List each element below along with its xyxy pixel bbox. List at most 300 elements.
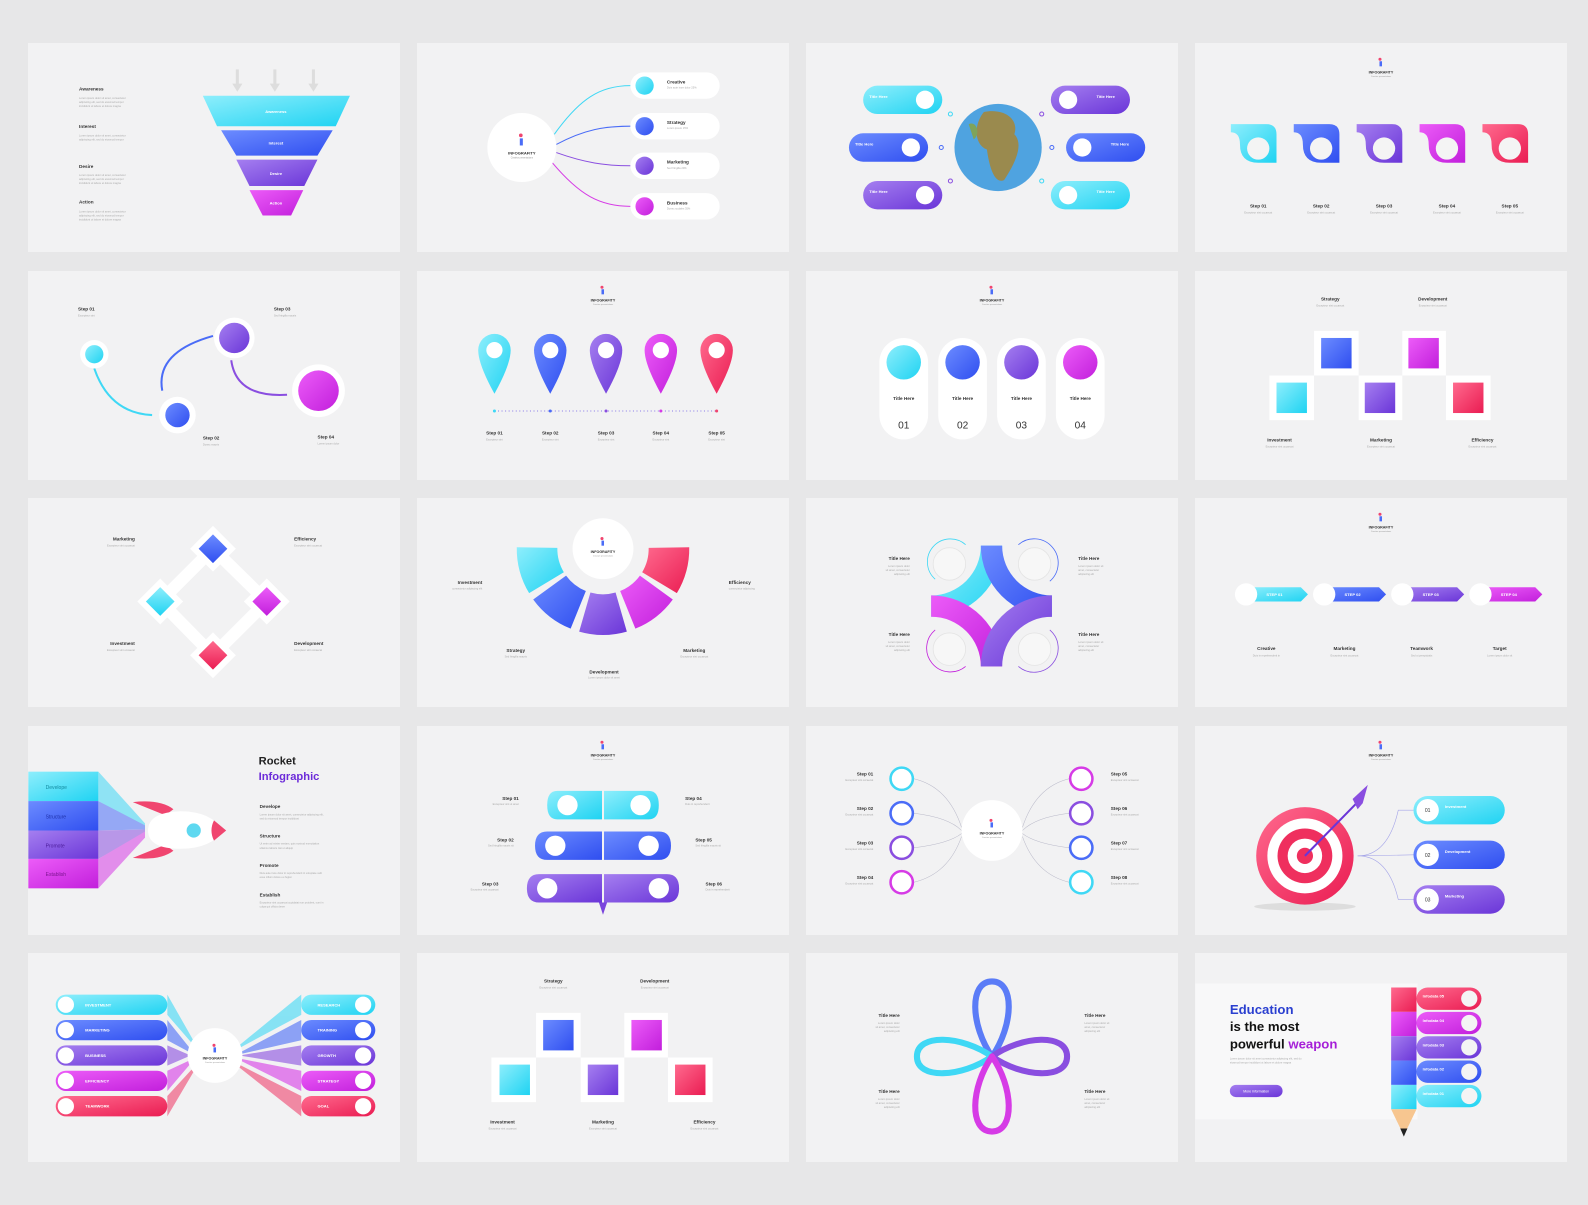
pencil: Infodata 02 xyxy=(1423,1067,1445,1072)
step labels xyxy=(486,430,725,441)
text blocks: sit amet, consectetur xyxy=(886,644,910,648)
arrows: funnel input xyxy=(232,69,318,92)
step labels xyxy=(1244,203,1524,214)
text blocks: amet, consectetur xyxy=(1084,1101,1105,1105)
pills: Business xyxy=(667,200,688,205)
button xyxy=(1230,1085,1283,1097)
right bars: STRATEGY xyxy=(317,1078,340,1083)
labels: Lorem ipsum dolor sit xyxy=(1487,653,1513,657)
labels: Excepteur sint occaecat xyxy=(1331,653,1359,657)
center logo circle: Creative presentations xyxy=(593,554,613,557)
labels: Excepteur sint occaecat xyxy=(845,812,874,816)
panel: hub slide xyxy=(806,726,1178,934)
funnel text blocks: adipiscing elit, sed do eiusmod tempor xyxy=(79,177,124,181)
left bars: TEAMWORK xyxy=(85,1104,110,1109)
capsules: 03 xyxy=(1016,420,1027,431)
pills: Development xyxy=(1445,848,1471,853)
funnel text blocks: Desire xyxy=(79,164,94,169)
text blocks: culpa qui officia deser xyxy=(260,904,285,908)
panel: squares slide 2 xyxy=(417,953,789,1162)
center logo circle xyxy=(487,113,556,182)
labels: Excepteur sint occaecat xyxy=(845,846,874,850)
labels: Excepteur sint occaecat xyxy=(1469,444,1497,448)
labels: Efficiency xyxy=(729,580,751,585)
labels: Lorem ipsum dolor sit amet xyxy=(588,676,620,680)
panel: capsule slide xyxy=(806,270,1178,480)
labels: Duis in reprehenderit in xyxy=(1253,653,1280,657)
labels: Marketing xyxy=(592,1119,614,1124)
labels: Marketing xyxy=(683,648,705,653)
funnel chart: Awareness xyxy=(265,109,287,114)
step texts: Donec mauris xyxy=(203,442,220,446)
labels: Creative xyxy=(1257,646,1276,651)
arrow steps: STEP 02 xyxy=(1344,592,1361,597)
capsules: Title Here xyxy=(1011,395,1032,400)
logo: Creative presentations xyxy=(1371,530,1391,533)
panel: bow-tie slide xyxy=(28,953,400,1162)
center logo circle: INFOGRAFITY xyxy=(591,550,616,554)
right pills xyxy=(1040,86,1145,209)
capsules: Title Here xyxy=(1070,395,1091,400)
capsules xyxy=(879,337,1105,439)
arc segments xyxy=(517,547,689,635)
labels: Step 03 xyxy=(857,840,874,845)
text blocks: Lorem ipsum dolor sit xyxy=(1084,1097,1110,1101)
logo xyxy=(1369,513,1394,533)
panel: funnel slide xyxy=(28,43,400,252)
connectors xyxy=(914,778,1069,882)
stacked labels: Promote xyxy=(46,843,65,849)
center logo circle: Creative presentations xyxy=(511,157,534,160)
labels: Sed fringilla mauris xyxy=(505,654,528,658)
labels: Step 06 xyxy=(1111,806,1128,811)
funnel text blocks xyxy=(79,87,126,222)
labels: Efficiency xyxy=(294,537,317,542)
center circle xyxy=(188,1028,242,1083)
funnel text blocks: incididunt ut labore et dolore magna xyxy=(79,104,121,108)
capsules: 02 xyxy=(957,420,969,431)
panel: target slide xyxy=(1195,726,1567,934)
diamond network xyxy=(137,526,290,678)
title: Infographic xyxy=(259,770,319,782)
labels: Excepteur sint occaecat xyxy=(641,986,669,990)
labels: Sed fringilla mauris sit xyxy=(488,843,514,847)
labels: Development xyxy=(640,978,670,983)
labels: Step 01 xyxy=(502,796,519,801)
pills: Strategy xyxy=(667,120,686,125)
arrow steps: STEP 03 xyxy=(1423,592,1439,597)
pills: Duis aute irure dolor 25% xyxy=(667,86,697,90)
text blocks: sit amet, consectetur xyxy=(886,568,910,572)
left bars: BUSINESS xyxy=(85,1053,106,1058)
arc bands xyxy=(931,546,1052,666)
text blocks: Lorem ipsum dolor sit xyxy=(1078,564,1104,568)
text blocks: Lorem ipsum dolor sit xyxy=(1078,640,1104,644)
connectors xyxy=(1358,810,1413,899)
labels: Target xyxy=(1493,646,1507,651)
pills: Marketing xyxy=(1445,893,1465,898)
labels: Excepteur sint occaecat xyxy=(1111,881,1139,885)
labels: Excepteur sint occaecat xyxy=(1111,777,1139,781)
capsules: 04 xyxy=(1075,420,1086,431)
labels: Marketing xyxy=(113,537,135,542)
labels: Strategy xyxy=(1321,296,1340,301)
pills: Lorem ipsum 15% xyxy=(667,126,689,130)
text blocks: Lorem ipsum dolor sit xyxy=(1084,1021,1110,1025)
beam xyxy=(98,771,145,888)
text blocks: adipiscing elit xyxy=(1084,1029,1100,1033)
center logo circle: INFOGRAFITY xyxy=(508,151,536,156)
step circles xyxy=(80,317,345,433)
arrow steps: STEP 01 xyxy=(1266,592,1283,597)
funnel text blocks: Awareness xyxy=(79,87,104,92)
pills: Donec sodales 35% xyxy=(667,206,691,210)
pills: Investment xyxy=(1445,804,1467,809)
step labels: Excepteur sint xyxy=(486,437,503,441)
text blocks: sed do eiusmod tempor incididunt xyxy=(260,816,299,820)
labels: Excepteur sint occaecat xyxy=(489,1127,517,1131)
right pills: Title Here xyxy=(1096,189,1116,194)
labels: consectetur adipiscing elit xyxy=(452,586,483,590)
pills: Marketing xyxy=(667,160,689,165)
rocket xyxy=(133,801,226,858)
right bars xyxy=(301,995,375,1116)
text blocks: Lorem ipsum dolor xyxy=(878,1021,900,1025)
funnel text blocks: Lorem ipsum dolor sit amet, consectetur xyxy=(79,133,126,137)
logo: INFOGRAFITY xyxy=(1369,525,1394,529)
panel: mind map slide xyxy=(417,43,789,252)
labels: Step 02 xyxy=(497,837,514,842)
labels: Sed ut perspiciatis xyxy=(1411,653,1433,657)
panel: ribbon steps slide xyxy=(1195,43,1567,252)
text blocks: Title Here xyxy=(889,556,910,561)
logo: Creative presentations xyxy=(982,302,1002,305)
labels: Efficiency xyxy=(1471,437,1494,442)
text blocks: Ut enim ad minim veniam, quis nostrud exercitation xyxy=(260,841,320,845)
button: More information xyxy=(1243,1090,1269,1094)
labels: Step 05 xyxy=(1111,771,1128,776)
labels: Step 01 xyxy=(857,771,874,776)
step texts: Sed fringilla mauris xyxy=(274,313,297,317)
text blocks: Lorem ipsum dolor sit amet, consectetur adipiscing elit, xyxy=(260,812,324,816)
step labels: Step 05 xyxy=(708,430,725,435)
labels: Excepteur sint occaecat xyxy=(845,777,874,781)
funnel text blocks: Lorem ipsum dolor sit amet, consectetur xyxy=(79,173,126,177)
panel: curved steps slide xyxy=(28,270,400,480)
pills: Creative xyxy=(667,80,686,85)
logo: Creative presentations xyxy=(593,757,613,760)
labels: Excepteur sint occaecat xyxy=(589,1127,617,1131)
step labels: Excepteur sint occaecat xyxy=(1496,210,1524,214)
loops xyxy=(917,981,1067,1132)
center logo circle xyxy=(573,518,633,579)
logo: Creative presentations xyxy=(1371,757,1391,760)
labels: Excepteur sint occaecat xyxy=(1367,444,1395,448)
text blocks: Title Here xyxy=(1084,1089,1106,1094)
text blocks: Lorem ipsum dolor xyxy=(878,1097,900,1101)
funnel chart xyxy=(203,96,350,215)
labels: Development xyxy=(589,670,619,675)
pencil: Infodata 03 xyxy=(1423,1042,1445,1047)
dotted timeline xyxy=(493,409,718,412)
step labels: Step 01 xyxy=(486,430,503,435)
panel: rocket slide xyxy=(28,726,400,934)
labels xyxy=(489,978,719,1131)
text blocks: ullamco laboris nisi ut aliquip xyxy=(260,845,294,849)
labels: Investment xyxy=(1267,437,1292,442)
body text: Lorem ipsum dolor sit amet consectetur adipiscing elit, sed do xyxy=(1230,1057,1302,1061)
step labels: Excepteur sint occaecat xyxy=(1307,210,1335,214)
panel: loops slide xyxy=(806,953,1178,1162)
left bars xyxy=(56,995,167,1116)
arrow steps xyxy=(1235,583,1542,606)
left pills: Title Here xyxy=(855,141,874,146)
step texts: Step 04 xyxy=(317,434,334,439)
step texts xyxy=(78,306,339,446)
labels: Excepteur sint occaecat xyxy=(1111,812,1139,816)
labels: Step 08 xyxy=(1111,875,1128,880)
labels: Strategy xyxy=(544,978,563,983)
target xyxy=(1254,784,1368,910)
panel: arrow steps slide xyxy=(1195,498,1567,707)
logo xyxy=(980,285,1005,305)
globe xyxy=(954,104,1042,191)
pills: 01 xyxy=(1425,808,1431,814)
step labels: Step 02 xyxy=(1313,203,1330,208)
text blocks: adipiscing elit xyxy=(1078,648,1094,652)
right bars: GROWTH xyxy=(317,1053,336,1058)
center circle: Creative presentations xyxy=(205,1061,225,1064)
step texts: Excepteur sint xyxy=(78,313,95,317)
logo: INFOGRAFITY xyxy=(591,298,616,302)
curved arrows xyxy=(94,335,287,415)
body text: eiusmod tempor incididunt ut labore et dolore magna xyxy=(1230,1061,1292,1065)
step texts: Step 03 xyxy=(274,306,291,311)
text blocks: Establish xyxy=(260,892,281,897)
labels: Excepteur sint occaecat xyxy=(680,654,709,658)
labels: Excepteur sint occaecat xyxy=(294,544,322,548)
labels: Excepteur sint occaecat xyxy=(107,648,135,652)
labels: Step 04 xyxy=(857,875,874,880)
step labels: Excepteur sint occaecat xyxy=(1244,210,1272,214)
labels xyxy=(1266,296,1497,448)
funnel text blocks: Lorem ipsum dolor sit amet, consectetur xyxy=(79,209,126,213)
icon circles with arrows xyxy=(927,539,1058,672)
stacked labels: Establish xyxy=(46,872,66,878)
labels xyxy=(107,537,324,652)
panel: four arcs slide xyxy=(806,498,1178,707)
funnel chart: Action xyxy=(270,200,283,205)
text blocks: Duis aute irure dolor in reprehenderit in voluptate velit xyxy=(260,871,322,875)
text blocks: Promote xyxy=(260,863,279,868)
text blocks: adipiscing elit xyxy=(1078,572,1094,576)
right bars: RESEARCH xyxy=(317,1002,340,1007)
ribbons xyxy=(1231,124,1528,163)
labels: Excepteur sint occaecat xyxy=(691,1127,719,1131)
capsules: Title Here xyxy=(893,395,915,400)
labels: Development xyxy=(1418,296,1448,301)
step labels: Excepteur sint xyxy=(598,437,615,441)
right pills: Title Here xyxy=(1111,141,1130,146)
panel: diamonds slide xyxy=(28,498,400,707)
panel: arc segments slide xyxy=(417,498,789,707)
panel: tree slide xyxy=(417,726,789,934)
text blocks: Title Here xyxy=(1084,1013,1106,1018)
text blocks: amet, consectetur xyxy=(1084,1025,1105,1029)
right bars: GOAL xyxy=(317,1104,330,1109)
step labels: Step 03 xyxy=(598,430,615,435)
funnel text blocks: Interest xyxy=(79,124,96,129)
logo xyxy=(1369,58,1394,78)
left bars: MARKETING xyxy=(85,1028,110,1033)
text blocks: adipiscing elit xyxy=(884,1029,900,1033)
text blocks: Title Here xyxy=(879,1013,900,1018)
text blocks xyxy=(260,804,324,908)
step labels: Step 04 xyxy=(653,430,670,435)
left pills: Title Here xyxy=(869,94,888,99)
text blocks: Title Here xyxy=(879,1089,900,1094)
labels: Step 07 xyxy=(1111,840,1128,845)
labels: Excepteur sint occaecat xyxy=(539,986,567,990)
labels: Step 04 xyxy=(685,796,702,801)
left bars: INVESTMENT xyxy=(85,1002,112,1007)
labels: Marketing xyxy=(1333,646,1356,651)
text blocks: adipiscing elit xyxy=(894,648,910,652)
step labels: Step 02 xyxy=(542,430,559,435)
step labels: Excepteur sint xyxy=(542,437,559,441)
pills: 02 xyxy=(1425,852,1431,858)
labels: Excepteur sint ut amet xyxy=(493,802,519,806)
labels: Excepteur sint occaecat xyxy=(471,887,499,891)
pills xyxy=(630,72,720,220)
labels: Efficiency xyxy=(693,1119,716,1124)
headline xyxy=(1230,1002,1337,1051)
center circle: INFOGRAFITY xyxy=(203,1057,228,1061)
labels: Investment xyxy=(110,641,135,646)
text blocks: sit amet, consectetur xyxy=(875,1101,900,1105)
connector curves xyxy=(552,86,630,206)
beams xyxy=(167,995,301,1116)
labels: Duis in reprehenderit xyxy=(705,887,730,891)
node circles xyxy=(891,767,1092,893)
pencil: Infodata 04 xyxy=(1423,1018,1445,1023)
title: Rocket xyxy=(259,755,296,767)
text blocks: Lorem ipsum dolor xyxy=(888,564,910,568)
labels: Sed fringilla mauris sit xyxy=(695,843,721,847)
panel: pins slide xyxy=(417,270,789,480)
center circle: Creative presentations xyxy=(982,836,1002,839)
pencil: Infodata 01 xyxy=(1423,1091,1445,1096)
panel: globe slide xyxy=(806,43,1178,252)
pencil xyxy=(1391,987,1481,1137)
labels: Step 02 xyxy=(857,806,874,811)
capsules: Title Here xyxy=(952,395,974,400)
center circle: INFOGRAFITY xyxy=(980,831,1005,835)
step labels: Step 03 xyxy=(1376,203,1393,208)
text blocks xyxy=(886,556,1104,652)
labels: Strategy xyxy=(506,648,525,653)
logo: Creative presentations xyxy=(1371,75,1391,78)
logo xyxy=(591,285,616,305)
map pins xyxy=(478,333,733,393)
text blocks: amet, consectetur xyxy=(1078,568,1099,572)
labels: Excepteur sint occaecat xyxy=(1111,846,1139,850)
logo: Creative presentations xyxy=(593,302,613,305)
text blocks: Develope xyxy=(260,804,281,809)
labels xyxy=(471,796,730,891)
pills xyxy=(1413,796,1505,913)
text blocks: Lorem ipsum dolor xyxy=(888,640,910,644)
logo: INFOGRAFITY xyxy=(1369,753,1394,757)
labels xyxy=(845,771,1139,885)
funnel text blocks: incididunt ut labore et dolore magna xyxy=(79,218,121,222)
step texts: Lorem ipsum dolor xyxy=(317,441,339,445)
text blocks: Title Here xyxy=(1078,556,1100,561)
tree leaves xyxy=(527,790,679,914)
capsules: 01 xyxy=(898,420,910,431)
funnel chart: Desire xyxy=(270,171,283,176)
step labels: Excepteur sint occaecat xyxy=(1433,210,1461,214)
left bars: EFFICIENCY xyxy=(85,1078,110,1083)
labels: Marketing xyxy=(1370,437,1392,442)
headline: is the most xyxy=(1230,1019,1300,1034)
arrow steps: STEP 04 xyxy=(1501,592,1518,597)
labels: Step 03 xyxy=(482,881,499,886)
text blocks: amet, consectetur xyxy=(1078,644,1099,648)
funnel text blocks: Lorem ipsum dolor sit amet, consectetur xyxy=(79,96,126,100)
step labels: Excepteur sint xyxy=(653,437,669,441)
step labels: Step 05 xyxy=(1502,203,1519,208)
funnel text blocks: adipiscing elit, sed do eiusmod tempor xyxy=(79,213,124,217)
text blocks: adipiscing elit xyxy=(884,1105,900,1109)
pencil: Infodata 05 xyxy=(1423,994,1445,999)
labels: Teamwork xyxy=(1410,646,1433,651)
labels xyxy=(1253,646,1513,657)
right pills: Title Here xyxy=(1096,94,1116,99)
labels: Step 05 xyxy=(695,837,712,842)
text blocks: Structure xyxy=(260,833,281,838)
labels: consectetur adipiscing xyxy=(729,586,755,590)
labels: Excepteur sint occaecat xyxy=(107,544,135,548)
step labels: Excepteur sint occaecat xyxy=(1370,210,1398,214)
step texts: Step 01 xyxy=(78,306,95,311)
logo: INFOGRAFITY xyxy=(591,753,616,757)
step labels: Step 01 xyxy=(1250,203,1267,208)
text blocks: adipiscing elit xyxy=(894,572,910,576)
funnel text blocks: Action xyxy=(79,199,94,204)
step labels: Step 04 xyxy=(1439,203,1456,208)
funnel chart: Interest xyxy=(269,140,284,145)
step labels: Excepteur sint xyxy=(708,437,725,441)
center circle xyxy=(962,800,1022,860)
logo xyxy=(1369,740,1394,760)
funnel text blocks: adipiscing elit, sed do eiusmod tempor xyxy=(79,137,124,141)
panel: education pencil slide xyxy=(1195,953,1567,1162)
labels: Excepteur sint occaecat xyxy=(1419,303,1447,307)
text blocks: sit amet, consectetur xyxy=(875,1025,900,1029)
text blocks: adipiscing elit xyxy=(1084,1105,1100,1109)
labels: Duis in reprehenderit xyxy=(685,802,710,806)
text blocks xyxy=(875,1013,1110,1109)
logo xyxy=(591,740,616,760)
funnel text blocks: incididunt ut labore et dolore magna xyxy=(79,181,121,185)
labels: Excepteur sint occaecat xyxy=(294,648,322,652)
stacked labels: Structure xyxy=(46,814,66,820)
white panel xyxy=(1195,983,1418,1119)
pills: 03 xyxy=(1425,897,1431,903)
labels: Excepteur sint occaecat xyxy=(1316,303,1344,307)
labels: Excepteur sint occaecat xyxy=(845,881,874,885)
